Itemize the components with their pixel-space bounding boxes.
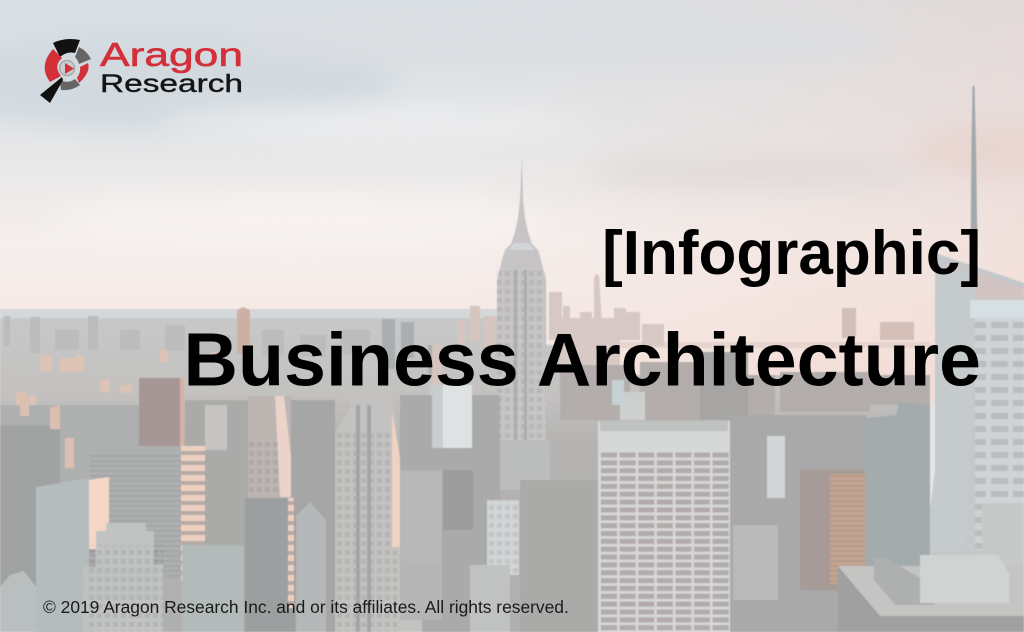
copyright notice: © 2019 Aragon Research Inc. and or its affiliates. All rights reserved. [43,597,569,617]
white box and ziggurat [182,545,244,632]
mid left blocks [0,405,140,632]
far city haze [0,316,930,632]
Empire State tower [497,155,546,485]
logo: Aragon Research [40,36,243,103]
rooftop foreground [838,555,1024,632]
logo: Aragon Research: Research [100,70,243,98]
red tower [139,378,184,446]
logo mark [40,39,91,103]
background: sky [0,0,1024,400]
right tower with spire [925,86,1024,592]
title: Business Architecture: Business Architecture [184,318,981,402]
striped office block [90,446,205,580]
distant towers [549,274,664,346]
dark glass tower [866,402,930,570]
label: Infographic: [Infographic] [602,219,981,288]
central stepped tower [335,392,422,632]
white office tower [598,421,730,632]
ornate tower and dark tower [248,396,291,498]
right mid blocks [520,480,598,632]
logo wordmark: Aragon [100,36,243,73]
